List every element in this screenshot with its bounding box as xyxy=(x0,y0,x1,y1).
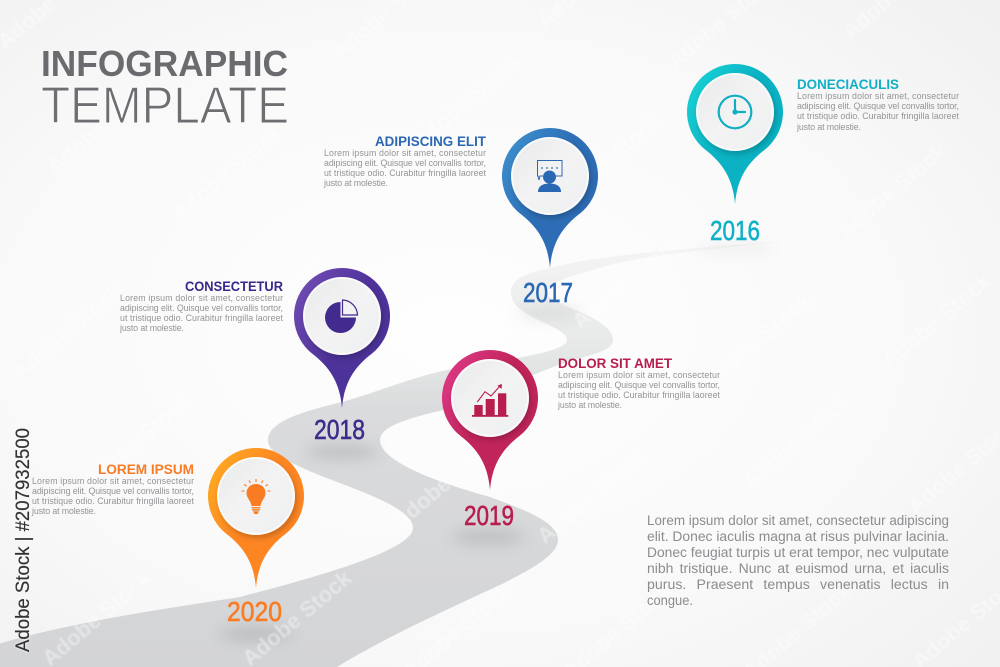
icon: clock xyxy=(719,96,751,128)
watermarks: Adobe Stock xyxy=(347,283,467,389)
milestone 2019 xyxy=(442,350,721,531)
text block 2020: justo at molestie. xyxy=(31,506,96,516)
text block 2018 xyxy=(119,293,284,333)
heading adipiscing elit: ADIPISCING ELIT xyxy=(375,134,487,149)
year 2017: 2017 xyxy=(523,277,573,308)
text block 2019: Lorem ipsum dolor sit amet, consectetur xyxy=(558,370,720,380)
text block 2016 xyxy=(796,91,960,132)
text block 2018: justo at molestie. xyxy=(119,323,184,333)
icon: presenter xyxy=(538,160,562,192)
milestone 2017 xyxy=(323,128,598,308)
text block 2020: adipiscing elit. Quisque vel convallis tortor, xyxy=(32,486,194,496)
heading dolor sit amet: DOLOR SIT AMET xyxy=(558,356,673,371)
text block 2020: ut tristique odio. Curabitur fringilla laoreet xyxy=(32,496,195,506)
text block 2020 xyxy=(31,476,195,516)
milestone 2016 xyxy=(687,64,960,246)
description paragraph: elit. Donec iaculis magna at risus pulvinar lacinia. xyxy=(647,529,949,544)
milestone 2020 xyxy=(31,448,304,627)
watermarks: Adobe Stock xyxy=(877,268,997,374)
description paragraph: congue. xyxy=(647,593,693,608)
text block 2017: adipiscing elit. Quisque vel convallis tortor, xyxy=(324,158,486,168)
text block 2016: Lorem ipsum dolor sit amet, consectetur xyxy=(797,91,959,101)
description paragraph: Donec feugiat turpis ut erat tempor, nec vulputate xyxy=(647,545,949,560)
pin 2018 xyxy=(294,268,390,408)
pin 2017 xyxy=(502,128,598,268)
title: INFOGRAPHIC xyxy=(41,43,288,84)
year 2020: 2020 xyxy=(227,596,282,627)
watermarks: Adobe Stock xyxy=(167,120,287,226)
text block 2017: Lorem ipsum dolor sit amet, consectetur xyxy=(324,148,486,158)
icon: bar chart with arrow xyxy=(472,384,508,417)
watermarks: Adobe Stock xyxy=(547,108,667,214)
text block 2018: adipiscing elit. Quisque vel convallis tortor, xyxy=(120,303,283,313)
text block 2018: Lorem ipsum dolor sit amet, consectetur xyxy=(120,293,283,303)
year 2018: 2018 xyxy=(314,414,365,445)
pin 2016 xyxy=(687,64,783,204)
watermarks: Adobe Stock xyxy=(697,288,817,394)
title xyxy=(41,43,289,135)
icon: pie chart xyxy=(325,300,358,333)
heading doneciaculis: DONECIACULIS xyxy=(797,77,899,92)
watermarks: Adobe Stock xyxy=(212,248,332,354)
description paragraph: purus. Praesent tempus venenatis lectus in xyxy=(647,577,949,592)
watermarks: Adobe Stock xyxy=(567,228,687,334)
text block 2019 xyxy=(557,370,721,410)
milestone 2018 xyxy=(119,268,390,445)
text block 2016: justo at molestie. xyxy=(796,122,861,132)
pin 2019 xyxy=(442,350,538,490)
stock id side label: Adobe Stock | #207932500 xyxy=(13,428,34,652)
text block 2017 xyxy=(323,148,487,188)
pin 2020 xyxy=(208,448,304,588)
text block 2016: ut tristique odio. Curabitur fringilla laoreet xyxy=(797,111,960,121)
road shadows xyxy=(220,244,775,641)
watermarks: Adobe Stock xyxy=(832,138,952,244)
watermarks: Adobe Stock xyxy=(407,48,527,154)
description paragraph xyxy=(647,513,949,608)
heading lorem ipsum: LOREM IPSUM xyxy=(98,462,194,477)
heading consectetur: CONSECTETUR xyxy=(185,279,283,294)
text block 2019: justo at molestie. xyxy=(557,400,622,410)
icon: light bulb xyxy=(242,479,270,514)
watermarks: Adobe Stock xyxy=(737,388,857,494)
watermarks: Adobe Stock xyxy=(42,73,162,179)
watermarks: Adobe Stock xyxy=(532,443,652,549)
text block 2017: ut tristique odio. Curabitur fringilla laoreet xyxy=(324,168,487,178)
watermarks: Adobe Stock xyxy=(77,388,197,494)
text block 2016: adipiscing elit. Quisque vel convallis tortor, xyxy=(797,101,959,111)
year 2019: 2019 xyxy=(464,500,514,531)
text block 2019: adipiscing elit. Quisque vel convallis tortor, xyxy=(558,380,720,390)
text block 2019: ut tristique odio. Curabitur fringilla laoreet xyxy=(558,390,721,400)
text block 2020: Lorem ipsum dolor sit amet, consectetur xyxy=(32,476,194,486)
year 2016: 2016 xyxy=(710,215,760,246)
text block 2017: justo at molestie. xyxy=(323,178,388,188)
winding road xyxy=(0,241,790,667)
watermarks: Adobe Stock xyxy=(387,428,507,534)
watermarks: Adobe Stock xyxy=(7,278,127,384)
title: TEMPLATE xyxy=(41,77,289,135)
text block 2018: ut tristique odio. Curabitur fringilla laoreet xyxy=(120,313,284,323)
description paragraph: nibh tristique. Nunc at euismod urna, et iaculis xyxy=(647,561,949,576)
description paragraph: Lorem ipsum dolor sit amet, consectetur adipiscing xyxy=(647,513,949,528)
